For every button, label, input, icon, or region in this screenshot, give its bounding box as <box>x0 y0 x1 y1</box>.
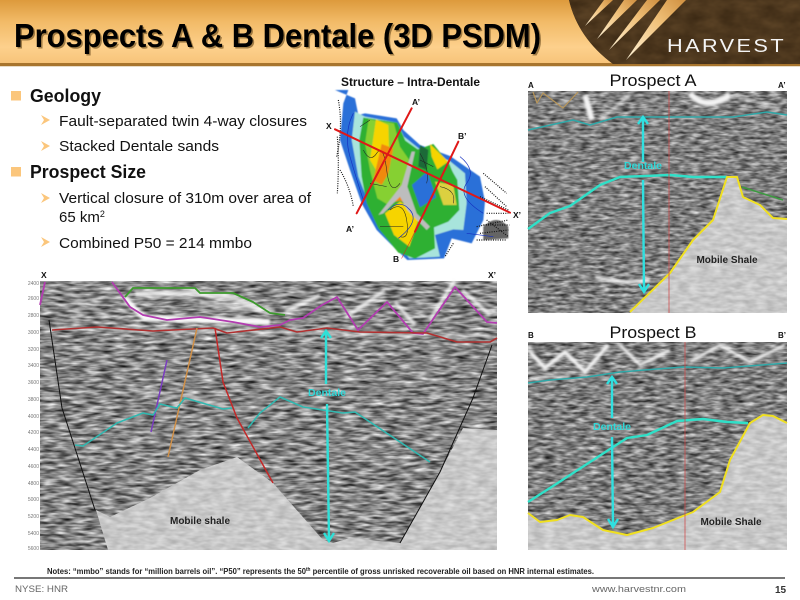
horizon lines <box>40 282 497 543</box>
arrow: Dentale thickness <box>607 377 618 527</box>
label: Dentale: Dentale <box>624 160 662 172</box>
sub-bullet: vertical closure: 2 <box>100 209 105 219</box>
sub-bullet: closures: Fault-separated twin 4-way closures <box>59 113 307 130</box>
panel: Prospect B <box>528 323 787 550</box>
depth axis: 3000 <box>28 330 39 336</box>
structure map panel <box>326 75 521 264</box>
structure map <box>335 90 512 260</box>
logo: Harvest panel <box>569 0 800 64</box>
depth axis: 5400 <box>28 531 39 537</box>
depth axis: 2600 <box>28 296 39 302</box>
depth axis: 3200 <box>28 347 39 353</box>
mobile shale <box>96 428 497 550</box>
label: Mobile Shale: Mobile Shale <box>696 255 758 266</box>
header banner <box>0 0 800 67</box>
map labels: A’ <box>346 224 354 234</box>
text block: Geology and Prospect Size bullets <box>11 86 312 252</box>
horizon lines <box>528 342 787 550</box>
icon: wheat spikes <box>585 0 686 60</box>
mobile shale <box>630 177 787 313</box>
ticker: NYSE: HNR <box>15 584 68 595</box>
depth axis: 4000 <box>28 414 39 420</box>
label: Mobile Shale: Mobile Shale <box>700 517 762 528</box>
footnote: Notes: “mmbo” stands for “million barrels oil”. “P50” represents the 50 <box>47 567 319 576</box>
seismic section X-X' <box>28 270 497 552</box>
bright reflectors <box>530 345 785 378</box>
depth axis: 4800 <box>28 481 39 487</box>
sub-bullet: vertical closure <box>41 190 312 226</box>
seismic background <box>528 342 787 550</box>
map labels: B <box>393 254 399 264</box>
seismic background <box>528 91 787 313</box>
section labels: B’ <box>778 331 786 340</box>
label: Mobile shale: Mobile shale <box>170 516 230 527</box>
section labels <box>41 270 496 280</box>
horizon lines <box>528 91 787 313</box>
section labels: X <box>41 270 47 280</box>
heading: Prospect B: Prospect B <box>610 323 696 342</box>
depth axis: 5600 <box>28 546 39 552</box>
website: www.harvestnr.com <box>591 584 686 595</box>
sub-bullet: vertical closure: 65 km <box>59 209 100 226</box>
seismic background <box>40 281 497 550</box>
depth axis: 4200 <box>28 430 39 436</box>
footer <box>14 577 787 596</box>
depth axis: 4600 <box>28 464 39 470</box>
footnote: percentile of gross unrisked recoverable oil based on HNR internal estimates. <box>310 567 594 576</box>
bright reflectors <box>585 93 780 282</box>
section line A-A' <box>357 108 412 213</box>
depth axis: 3600 <box>28 380 39 386</box>
sub-bullet: sands: Stacked Dentale sands <box>59 138 219 155</box>
section labels: A <box>528 81 534 90</box>
label: Dentale: Dentale <box>308 387 346 399</box>
bright reflectors <box>50 280 490 405</box>
map labels: X <box>326 121 332 131</box>
heading: Prospect A: Prospect A <box>610 71 697 90</box>
section labels: A’ <box>778 81 786 90</box>
arrow: Dentale thickness <box>321 331 334 541</box>
arrow: Dentale thickness <box>638 117 649 292</box>
depth axis: 3400 <box>28 363 39 369</box>
map labels: A’ <box>412 97 420 107</box>
section labels: X’ <box>488 270 496 280</box>
map title: Structure – Intra-Dentale <box>341 75 480 89</box>
mobile shale <box>528 415 787 550</box>
title: Prospects A & B Dentale (3D PSDM) <box>16 18 542 56</box>
section line X-X' <box>335 129 510 213</box>
bullet heading: Prospect Size: Prospect Size <box>30 162 146 182</box>
section line B-B' <box>415 142 458 232</box>
bullet heading: Geology: Geology <box>30 86 101 106</box>
page number: 15 <box>775 585 787 596</box>
depth axis: 4400 <box>28 447 39 453</box>
map labels <box>326 97 521 264</box>
depth axis <box>28 281 39 552</box>
footnote: th <box>306 567 310 573</box>
sub-bullet: P50: Combined P50 = 214 mmbo <box>59 235 252 252</box>
map labels: X’ <box>513 210 521 220</box>
depth axis: 2800 <box>28 313 39 319</box>
section labels <box>528 331 786 340</box>
map labels: B’ <box>458 131 466 141</box>
section labels: B <box>528 331 534 340</box>
logo wordmark: HARVEST <box>667 36 786 56</box>
sub-bullet: vertical closure: Vertical closure of 310m over area of <box>59 190 312 207</box>
panel: Prospect A <box>528 71 787 313</box>
title: Prospects A & B Dentale (3D PSDM) <box>14 17 541 54</box>
depth axis: 5200 <box>28 514 39 520</box>
depth axis: 2400 <box>28 281 39 287</box>
depth axis: 3800 <box>28 397 39 403</box>
depth axis: 5000 <box>28 497 39 503</box>
label: Dentale: Dentale <box>593 421 631 433</box>
section labels <box>528 81 786 90</box>
